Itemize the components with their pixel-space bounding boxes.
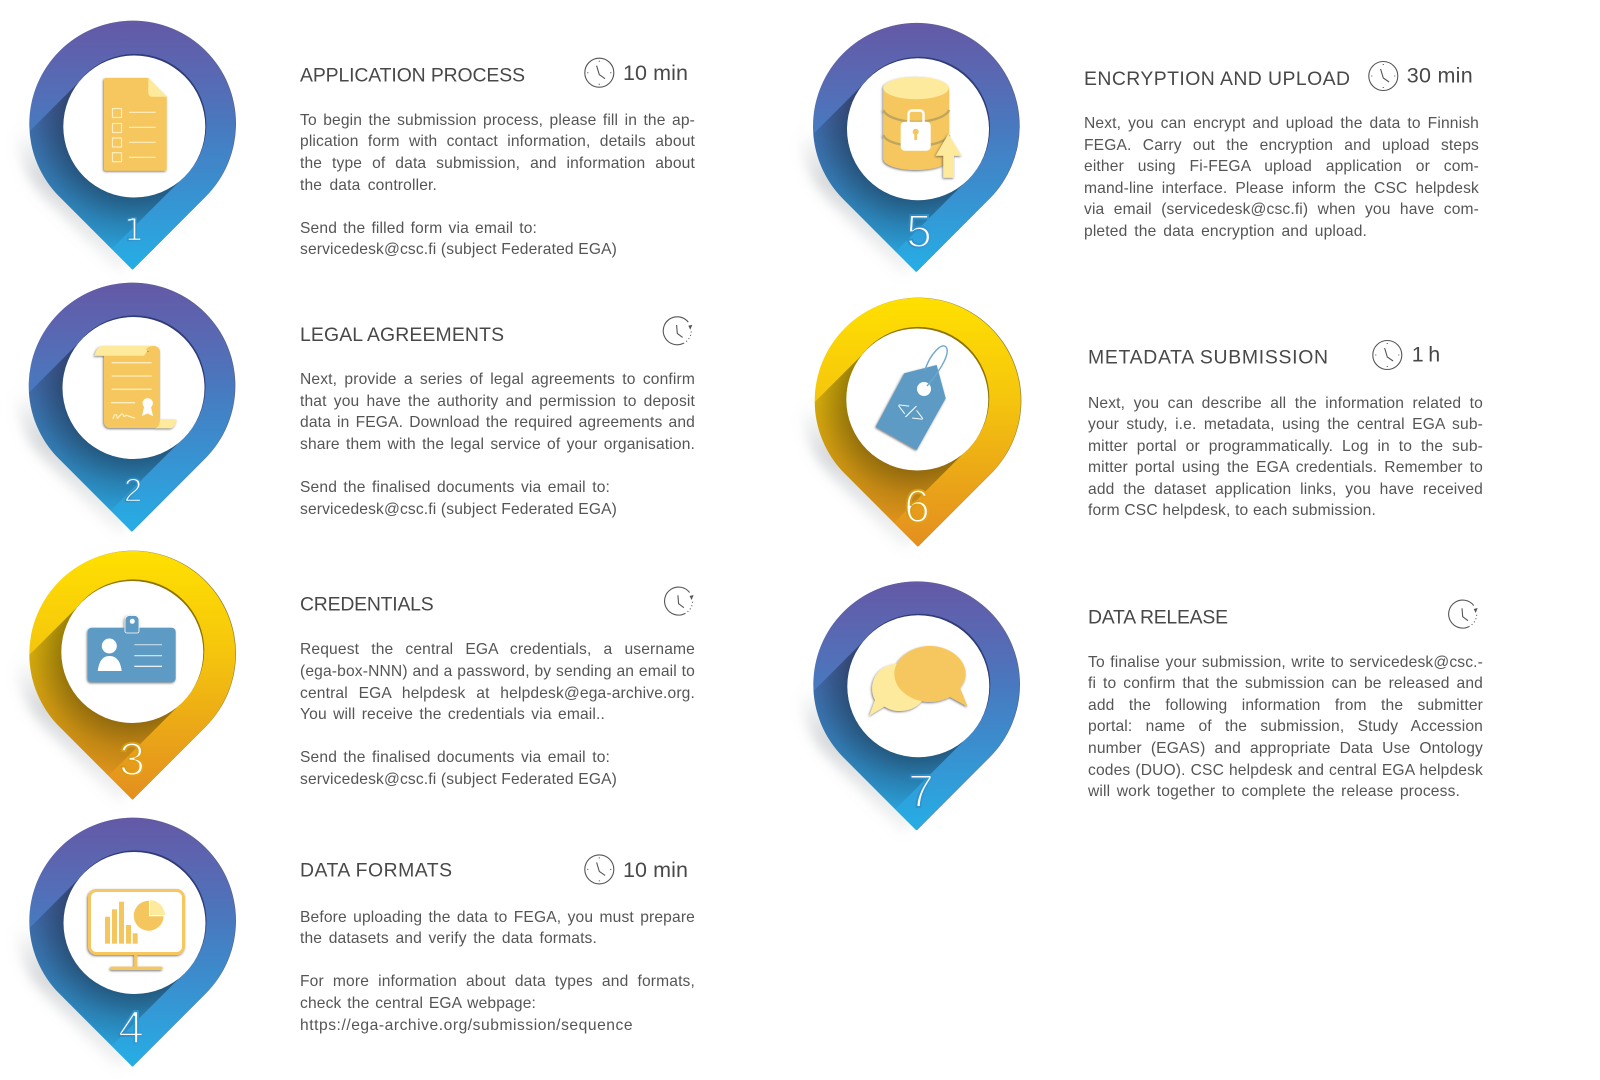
- body text: add the following information from the submitter: [1088, 697, 1483, 714]
- clock icon: [585, 855, 614, 884]
- body text: the data controller.: [300, 177, 437, 194]
- body text: [300, 112, 695, 258]
- step 3: credentials: [19, 550, 695, 800]
- body text: codes (DUO). CSC helpdesk and central EGA helpdesk: [1088, 762, 1483, 779]
- body text: [1088, 394, 1483, 519]
- heading: METADATA SUBMISSION: [1088, 346, 1328, 368]
- body text: [300, 641, 695, 788]
- body text: via email (servicedesk@csc.fi) when you have com-: [1084, 201, 1479, 218]
- clock icon: [1373, 340, 1402, 370]
- step 6: metadata submission: [804, 298, 1483, 547]
- body text: Send the filled form via email to:: [300, 220, 537, 237]
- clock icon: [663, 317, 692, 345]
- number 6: 6: [904, 480, 930, 532]
- number 2: 2: [124, 472, 142, 509]
- body text: share them with the legal service of your organisation.: [300, 436, 695, 453]
- body text: servicedesk@csc.fi (subject Federated EGA): [300, 771, 617, 788]
- clock icon: [585, 58, 614, 87]
- clock icon: [1449, 600, 1478, 628]
- body text: servicedesk@csc.fi (subject Federated EGA): [300, 241, 617, 258]
- pin 4: [19, 818, 236, 1067]
- body text: pleted the data encryption and upload.: [1084, 223, 1367, 240]
- heading: APPLICATION PROCESS: [300, 65, 525, 87]
- heading: CREDENTIALS: [300, 593, 434, 615]
- body text: [300, 371, 695, 518]
- body text: Next, you can describe all the information related to: [1088, 394, 1483, 412]
- icon: id badge: [88, 616, 176, 682]
- body text: [1084, 115, 1479, 240]
- duration: 30 min: [1407, 64, 1473, 88]
- step 7: data release: [803, 581, 1483, 830]
- pin 3: [19, 550, 236, 800]
- body text: mitter portal using the EGA credentials. Remember to: [1088, 459, 1483, 476]
- body text: add the dataset application links, you have received: [1088, 481, 1483, 498]
- icon: speech bubbles: [869, 646, 968, 716]
- number 3: 3: [119, 733, 145, 785]
- icon: metadata tag: [876, 346, 947, 450]
- step 5: encryption and upload: [802, 22, 1479, 272]
- icon: monitor with charts: [90, 890, 184, 968]
- heading: ENCRYPTION AND UPLOAD: [1084, 68, 1350, 90]
- body text: Next, provide a series of legal agreements to confirm: [300, 371, 695, 388]
- body text: You will receive the credentials via email..: [300, 706, 605, 723]
- duration: 10 min: [623, 858, 688, 882]
- body text: [300, 909, 695, 1034]
- pin 5: [802, 22, 1020, 272]
- body text: central EGA helpdesk at helpdesk@ega-archive.org.: [300, 685, 695, 702]
- body text: (ega-box-NNN) and a password, by sending an email to: [300, 663, 695, 680]
- body text: portal: name of the submission, Study Accession: [1088, 718, 1483, 735]
- body text: either using Fi-FEGA upload application or com-: [1084, 158, 1479, 175]
- body text: data in FEGA. Download the required agreements and: [300, 414, 695, 431]
- body text: servicedesk@csc.fi (subject Federated EGA): [300, 501, 617, 518]
- icon: upload arrow: [936, 134, 962, 178]
- body text: For more information about data types and formats,: [300, 973, 695, 990]
- icon: locked database: [883, 77, 949, 170]
- number 4: 4: [118, 1001, 144, 1053]
- body text: form CSC helpdesk, to each submission.: [1088, 502, 1376, 519]
- body text: Send the finalised documents via email to:: [300, 479, 610, 496]
- step 2: legal agreements: [18, 282, 695, 532]
- icon: padlock: [901, 110, 931, 151]
- body text: number (EGAS) and appropriate Data Use Ontology: [1088, 740, 1483, 757]
- body text: Next, you can encrypt and upload the data to Finnish: [1084, 115, 1479, 132]
- icon: legal scroll: [94, 346, 177, 428]
- body text: your study, i.e. metadata, using the central EGA sub-: [1088, 416, 1483, 433]
- body text: fi to confirm that the submission can be released and: [1088, 675, 1483, 692]
- body text: FEGA. Carry out the encryption and upload steps: [1084, 137, 1479, 154]
- heading: DATA FORMATS: [300, 860, 452, 882]
- number 1: 1: [124, 213, 144, 249]
- clock icon: [665, 587, 694, 615]
- icon: form document: [104, 78, 167, 171]
- body text: the datasets and verify the data formats.: [300, 930, 597, 947]
- step 1: application process: [19, 20, 695, 270]
- number 5: 5: [906, 205, 932, 257]
- body text: To begin the submission process, please fill in the ap-: [300, 112, 695, 129]
- body text: will work together to complete the release process.: [1088, 783, 1460, 800]
- duration: 1 h: [1412, 343, 1440, 367]
- body text: Before uploading the data to FEGA, you must prepare: [300, 909, 695, 926]
- clock icon: [1369, 62, 1398, 90]
- number 7: 7: [908, 765, 934, 817]
- step 4: data formats: [19, 818, 695, 1067]
- body text: that you have the authority and permission to deposit: [300, 393, 695, 410]
- body text: To finalise your submission, write to servicedesk@csc.-: [1088, 654, 1483, 671]
- heading: LEGAL AGREEMENTS: [300, 324, 504, 346]
- body text: check the central EGA webpage:: [300, 995, 536, 1012]
- icon: metadata tag: </>: [892, 395, 929, 430]
- body text: [1088, 654, 1483, 800]
- body text: mand-line interface. Please inform the CSC helpdesk: [1084, 180, 1479, 197]
- duration: 10 min: [623, 61, 688, 85]
- heading: DATA RELEASE: [1088, 606, 1228, 628]
- pin 6: [804, 298, 1022, 547]
- pin 7: [803, 581, 1020, 830]
- pin 1: [19, 20, 236, 270]
- body text: https://ega-archive.org/submission/sequence: [300, 1017, 633, 1034]
- body text: Send the finalised documents via email to:: [300, 749, 610, 766]
- pin 2: [18, 282, 236, 532]
- body text: the type of data submission, and information about: [300, 155, 695, 172]
- body text: mitter portal or programmatically. Log in to the sub-: [1088, 438, 1483, 455]
- body text: Request the central EGA credentials, a username: [300, 641, 695, 658]
- body text: plication form with contact information, details about: [300, 133, 695, 150]
- icon: bars and pie: [105, 900, 165, 944]
